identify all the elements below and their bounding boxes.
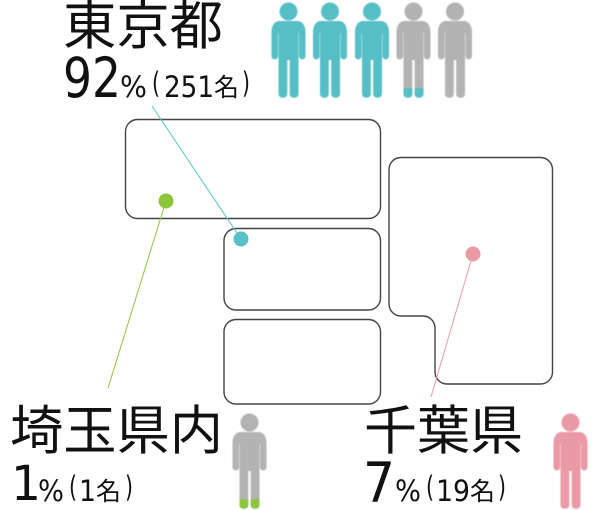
stat: Chiba percentage: % bbox=[395, 474, 421, 508]
stat: Tokyo percentage: 92 bbox=[63, 46, 121, 110]
stat: Tokyo percentage: % bbox=[120, 70, 147, 104]
stat: Chiba percentage: 名 bbox=[470, 472, 495, 508]
stat: Saitama percentage: ( bbox=[69, 470, 77, 504]
stat: Chiba percentage: 19 bbox=[436, 474, 470, 508]
marker: Tokyo dot bbox=[234, 232, 248, 246]
stat: Tokyo percentage: ) bbox=[242, 66, 250, 100]
stat: Chiba percentage: ( bbox=[426, 470, 434, 504]
leader line: Saitama bbox=[108, 201, 166, 388]
marker: Chiba dot bbox=[466, 246, 480, 262]
stat: Saitama percentage: 名 bbox=[96, 472, 121, 508]
stat: Tokyo percentage: ( bbox=[152, 66, 160, 100]
marker: Saitama dot bbox=[158, 194, 174, 208]
icon: Saitama person bbox=[232, 414, 266, 509]
stat: Saitama percentage: 1 bbox=[79, 474, 96, 508]
stat: Chiba percentage bbox=[363, 451, 506, 510]
stat: Tokyo percentage: 251 bbox=[164, 70, 214, 104]
stat: Saitama percentage: ) bbox=[125, 470, 133, 504]
heading: Chiba: 千葉県 bbox=[364, 402, 523, 461]
stat: Chiba percentage: ) bbox=[498, 470, 506, 504]
map block: eastern area bbox=[389, 158, 552, 384]
heading: Saitama: 埼玉県内 bbox=[10, 402, 223, 461]
map block: central area bbox=[224, 228, 380, 310]
stat: Saitama percentage: % bbox=[38, 474, 64, 508]
icon row: Tokyo people bbox=[272, 2, 472, 98]
icon: Chiba person bbox=[554, 414, 588, 509]
map block: northwest area bbox=[126, 120, 380, 218]
map block: southern area bbox=[224, 320, 380, 404]
stat: Tokyo percentage: 名 bbox=[214, 68, 239, 104]
stat: Tokyo percentage bbox=[63, 46, 250, 110]
stat: Saitama percentage bbox=[11, 456, 133, 510]
leader line: Chiba bbox=[431, 254, 473, 397]
leader line: Tokyo bbox=[152, 106, 241, 239]
